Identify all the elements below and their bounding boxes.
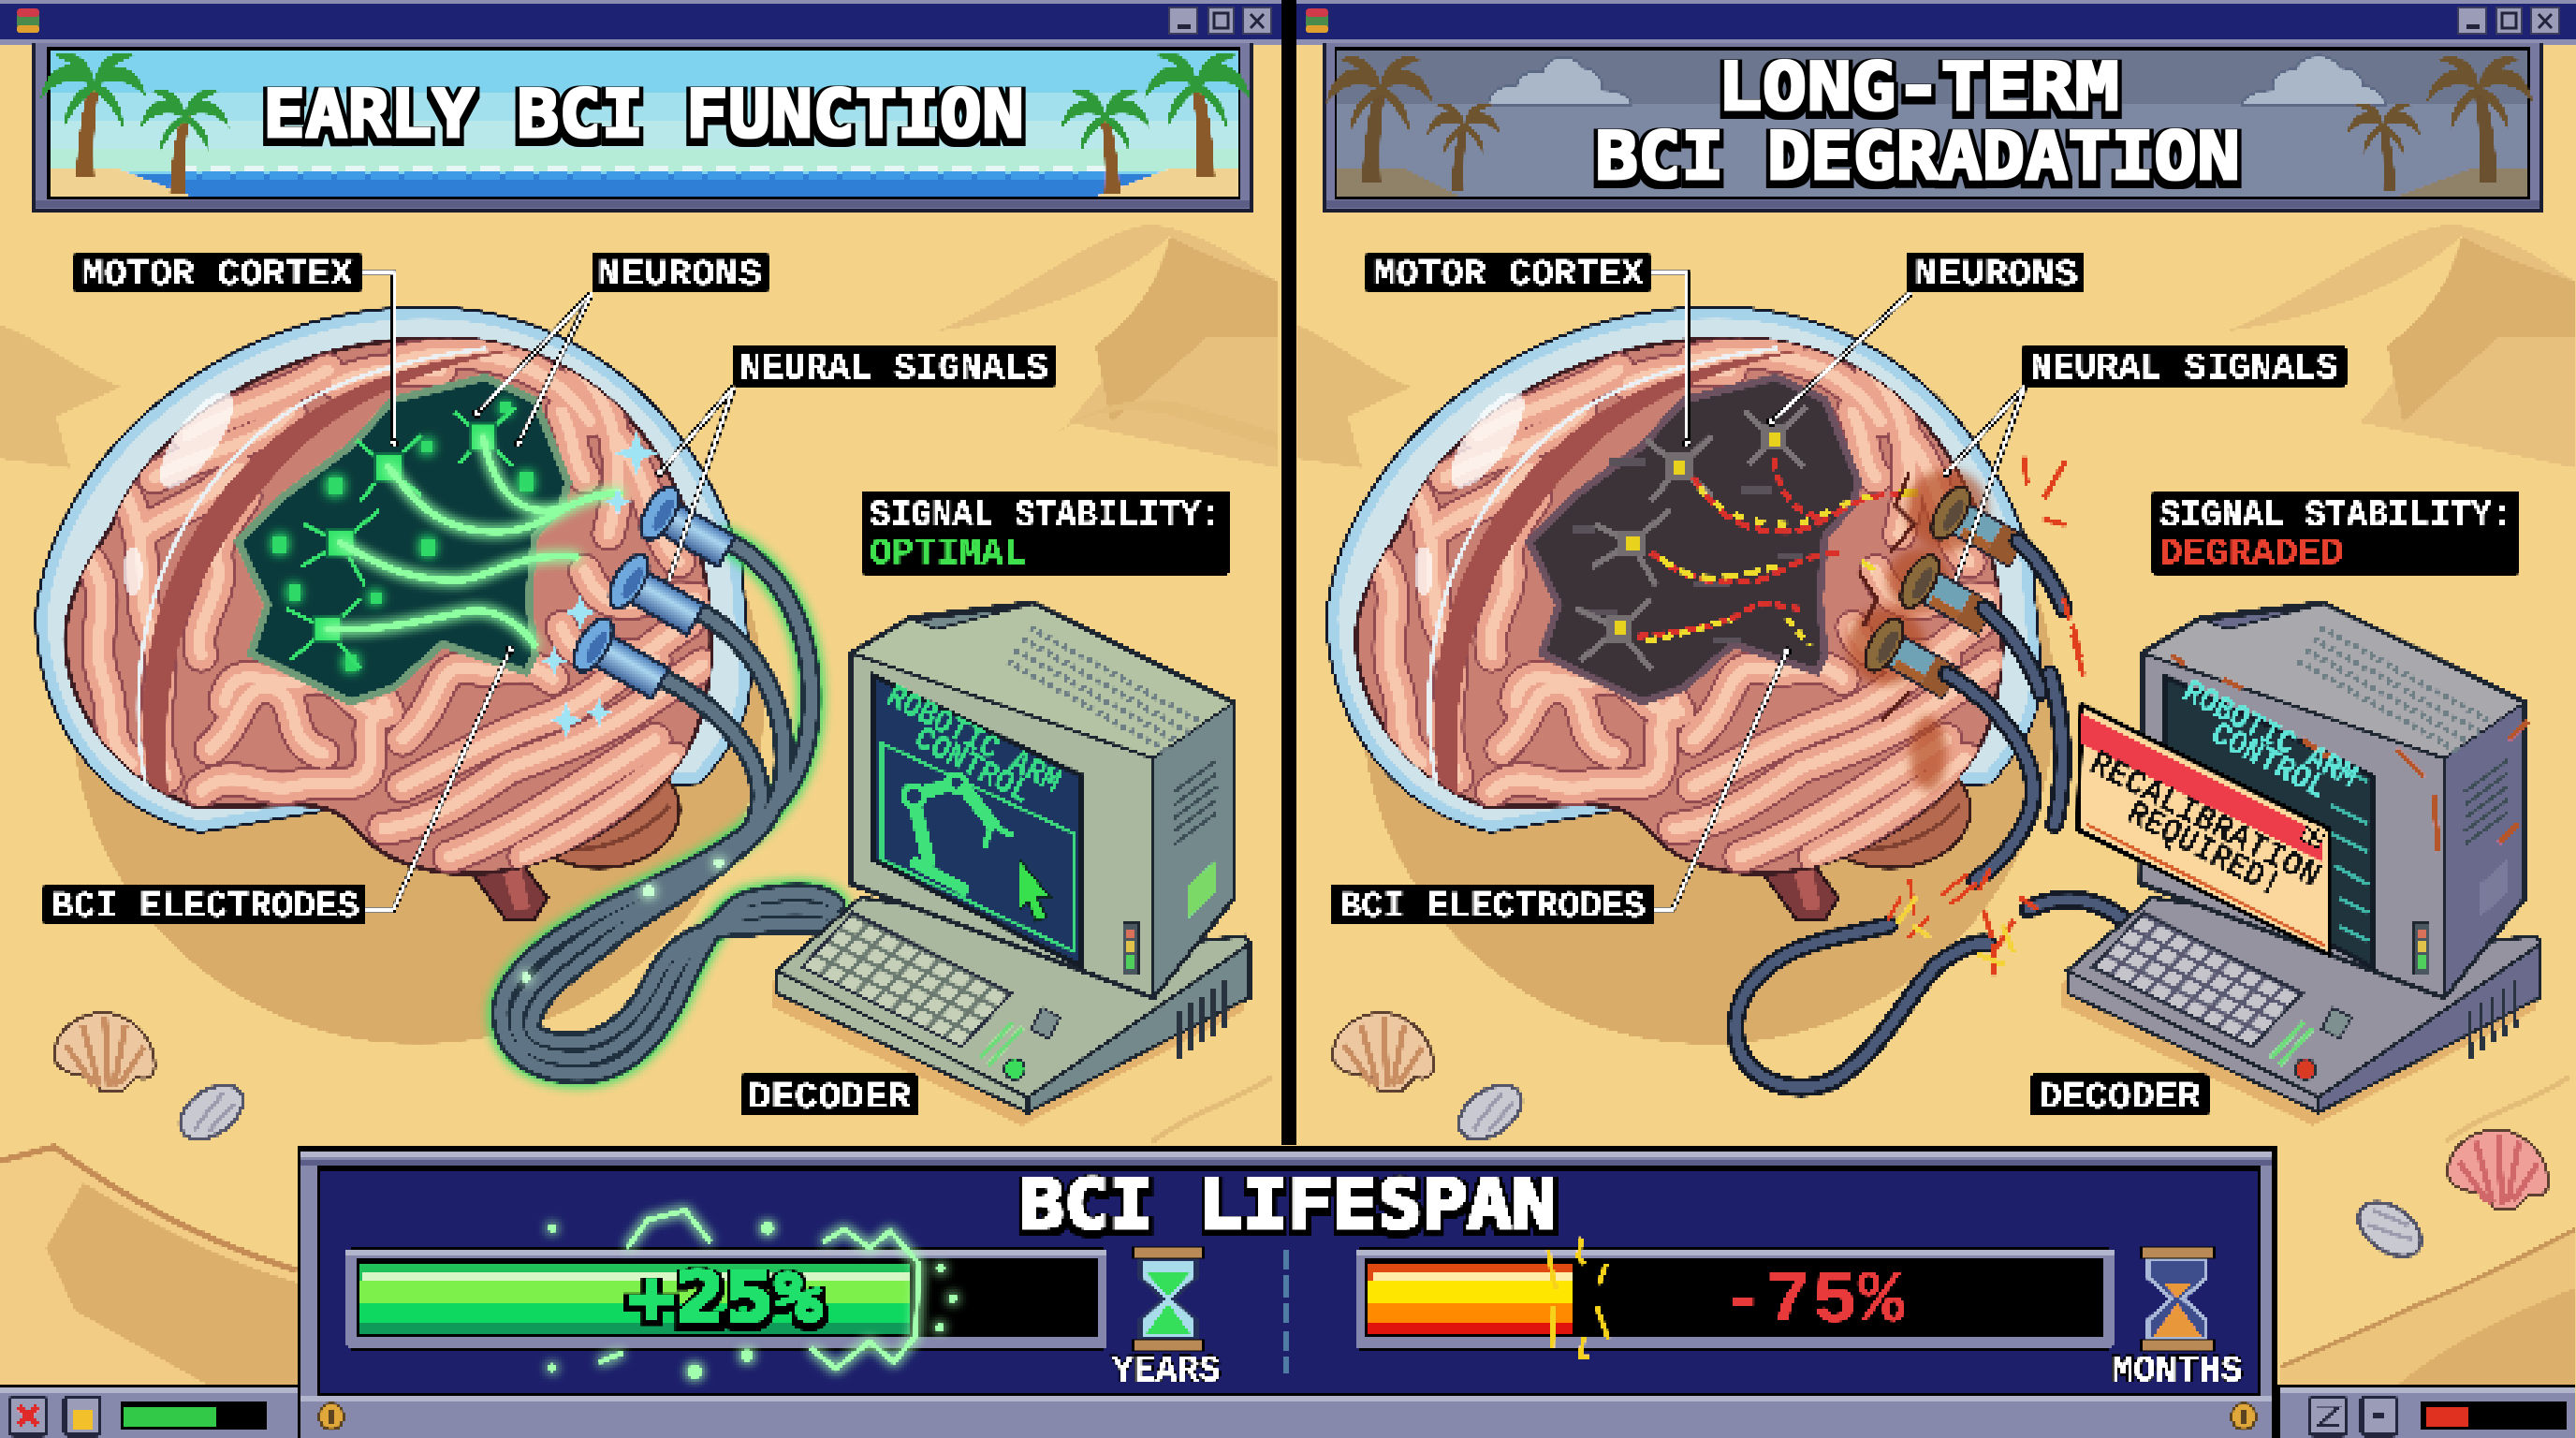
button: close — [10, 1397, 46, 1435]
clouds — [1488, 55, 2385, 105]
glitch lines — [2331, 763, 2368, 941]
status: signal stability degraded: DEGRADED — [2159, 534, 2344, 576]
popup: recalibration required — [2078, 705, 2330, 955]
label: motor cortex: MOTOR CORTEX — [81, 255, 353, 297]
palm trees left — [40, 52, 229, 195]
label: neural signals, degraded panel: NEURAL SIGNALS — [2030, 348, 2338, 390]
neurons — [285, 407, 515, 669]
status: signal stability optimal — [861, 491, 1230, 576]
label: BCI electrodes, degraded panel: BCI ELECTRODES — [1339, 887, 1646, 929]
screen text: CONTROL — [2204, 715, 2333, 808]
corroded cortex window — [1529, 377, 1918, 702]
label: months: MONTHS — [2112, 1351, 2243, 1393]
status bar: left — [0, 1384, 300, 1438]
icon: hourglass, years — [1133, 1247, 1204, 1351]
status: signal stability optimal: SIGNAL STABILITY: — [870, 495, 1222, 537]
progress bar: months -75% — [1355, 1238, 2114, 1357]
window title bar: right — [1296, 0, 2576, 45]
label: neurons: NEURONS — [597, 255, 762, 297]
button: arrows — [2362, 1397, 2396, 1435]
icon: window logo — [17, 8, 39, 33]
computer: decoder, degraded — [2062, 604, 2540, 1125]
cracks — [1858, 473, 1914, 721]
sparks — [1889, 459, 2083, 974]
shells: right panel — [1333, 1013, 2548, 1267]
leader lines — [361, 272, 2025, 910]
robotic arm icon — [903, 774, 1011, 889]
icon: window logo — [1306, 8, 1328, 33]
icon: cursor — [1019, 859, 1050, 921]
label: years: YEARS — [1112, 1351, 1221, 1393]
screen text: ROBOTIC ARM — [2176, 673, 2364, 797]
icon: info right — [2232, 1403, 2256, 1430]
status bar: right — [2276, 1384, 2576, 1438]
label: decoder, degraded panel: DECODER — [2039, 1078, 2201, 1120]
status meter: red — [2422, 1401, 2566, 1431]
brain: degraded — [1333, 314, 2127, 1087]
dead neurons — [1576, 407, 1806, 669]
heading: BCI LIFESPAN — [1019, 1165, 1557, 1243]
button: settings — [2310, 1397, 2346, 1435]
rust marks — [2172, 655, 2527, 852]
label: BCI electrodes: BCI ELECTRODES — [51, 887, 359, 929]
sparkles — [541, 431, 659, 738]
divider — [1284, 1249, 1290, 1374]
screen text: CONTROL — [908, 720, 1036, 813]
window title bar: left — [0, 0, 1281, 45]
button: warning — [65, 1397, 100, 1435]
title line 1: LONG-TERM — [1718, 49, 2119, 125]
label: decoder: DECODER — [748, 1078, 911, 1120]
neural signals — [328, 437, 620, 645]
label: motor cortex, degraded panel: MOTOR CORTEX — [1373, 255, 1644, 297]
crackling sparks — [1548, 1238, 1608, 1357]
progress bar: years +25% — [346, 1211, 1107, 1376]
shells: left panel — [54, 1013, 253, 1150]
label: neural signals: NEURAL SIGNALS — [739, 348, 1048, 390]
title: EARLY BCI FUNCTION — [263, 76, 1024, 153]
popup: recalibration required: RECALIBRATION — [2082, 744, 2327, 897]
label: neurons, degraded panel: NEURONS — [1914, 255, 2078, 297]
status: signal stability optimal: OPTIMAL — [870, 534, 1026, 576]
lightning glow — [550, 1211, 955, 1376]
value: -75% — [1720, 1259, 1905, 1344]
icon: info left — [319, 1403, 344, 1430]
status meter: green — [121, 1401, 268, 1431]
banner: long-term BCI degradation — [1323, 43, 2543, 213]
scorch marks — [1847, 469, 1988, 791]
screen text: ROBOTIC ARM — [880, 678, 1067, 801]
broken cables — [1735, 541, 2127, 1087]
motor cortex window with glowing neurons — [238, 377, 659, 738]
palm trees right — [1061, 52, 1251, 195]
status: signal stability degraded — [2152, 491, 2520, 576]
panel divider — [1281, 0, 1296, 1145]
title line 2: BCI DEGRADATION — [1595, 118, 2240, 195]
dead palm trees — [1326, 56, 2533, 191]
window buttons — [2458, 7, 2559, 34]
rusty electrodes — [1858, 481, 2032, 709]
panel: BCI lifespan — [297, 1145, 2276, 1438]
window buttons — [1169, 7, 1271, 34]
computer: decoder, working — [771, 604, 1250, 1125]
banner: early BCI function — [32, 43, 1253, 213]
status: signal stability degraded: SIGNAL STABILITY: — [2159, 495, 2512, 537]
value: +25% — [627, 1257, 824, 1338]
broken signals — [1637, 459, 1918, 646]
icon: hourglass, months — [2141, 1247, 2214, 1351]
popup: recalibration required: REQUIRED! — [2119, 794, 2288, 907]
cables: glowing — [501, 541, 836, 1074]
electrodes: clean — [567, 481, 741, 709]
